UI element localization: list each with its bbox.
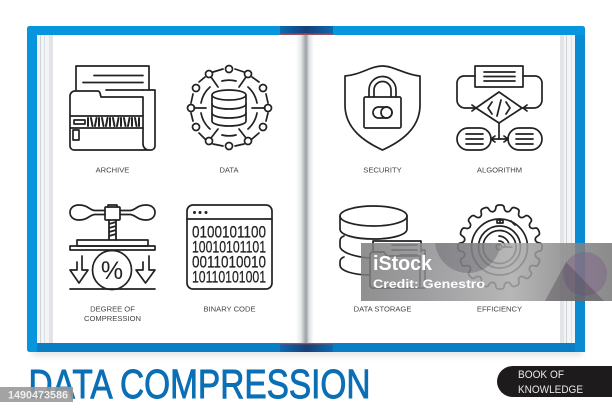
right page [306,35,575,343]
icon: efficiency gear [458,205,542,289]
title: DATA COMPRESSION [28,361,370,407]
watermark band: iStock [373,253,433,275]
icon: binary code: 10010101101 [192,238,266,256]
icon: binary code: 10110101001 [192,268,266,286]
label: efficiency: EFFICIENCY [477,304,522,314]
icon: binary code: 0011010010 [192,254,266,272]
badge: book of knowledge: BOOK OF [518,369,564,381]
icon: degree of compression: % [101,257,123,285]
label: algorithm: ALGORITHM [477,166,522,174]
label: data: DATA [219,166,239,174]
icon: binary code [187,205,272,289]
icon: data [188,66,272,150]
badge: book of knowledge [497,366,612,397]
stock id tag: 1490473586 [8,390,68,402]
icon: algorithm [457,66,542,150]
label: binary code: BINARY CODE [203,304,256,314]
label: archive: ARCHIVE [96,166,129,174]
icon: binary code: 0100101100 [192,224,266,242]
icon: archive [70,66,155,150]
badge: book of knowledge: KNOWLEDGE [518,384,583,396]
label: degree of compression: COMPRESSION [84,314,141,323]
icon: degree of compression [70,205,155,290]
left page [37,35,306,343]
icon: security [345,66,420,150]
icon: data storage [340,206,425,288]
label: security: SECURITY [363,166,402,174]
label: data storage: DATA STORAGE [354,304,411,314]
book cover [27,26,585,352]
watermark band [361,243,612,301]
stock id tag [0,387,73,402]
book drop shadow [32,40,582,356]
label: degree of compression: DEGREE OF [90,304,135,314]
watermark band: Credit: Genestro [373,277,485,291]
